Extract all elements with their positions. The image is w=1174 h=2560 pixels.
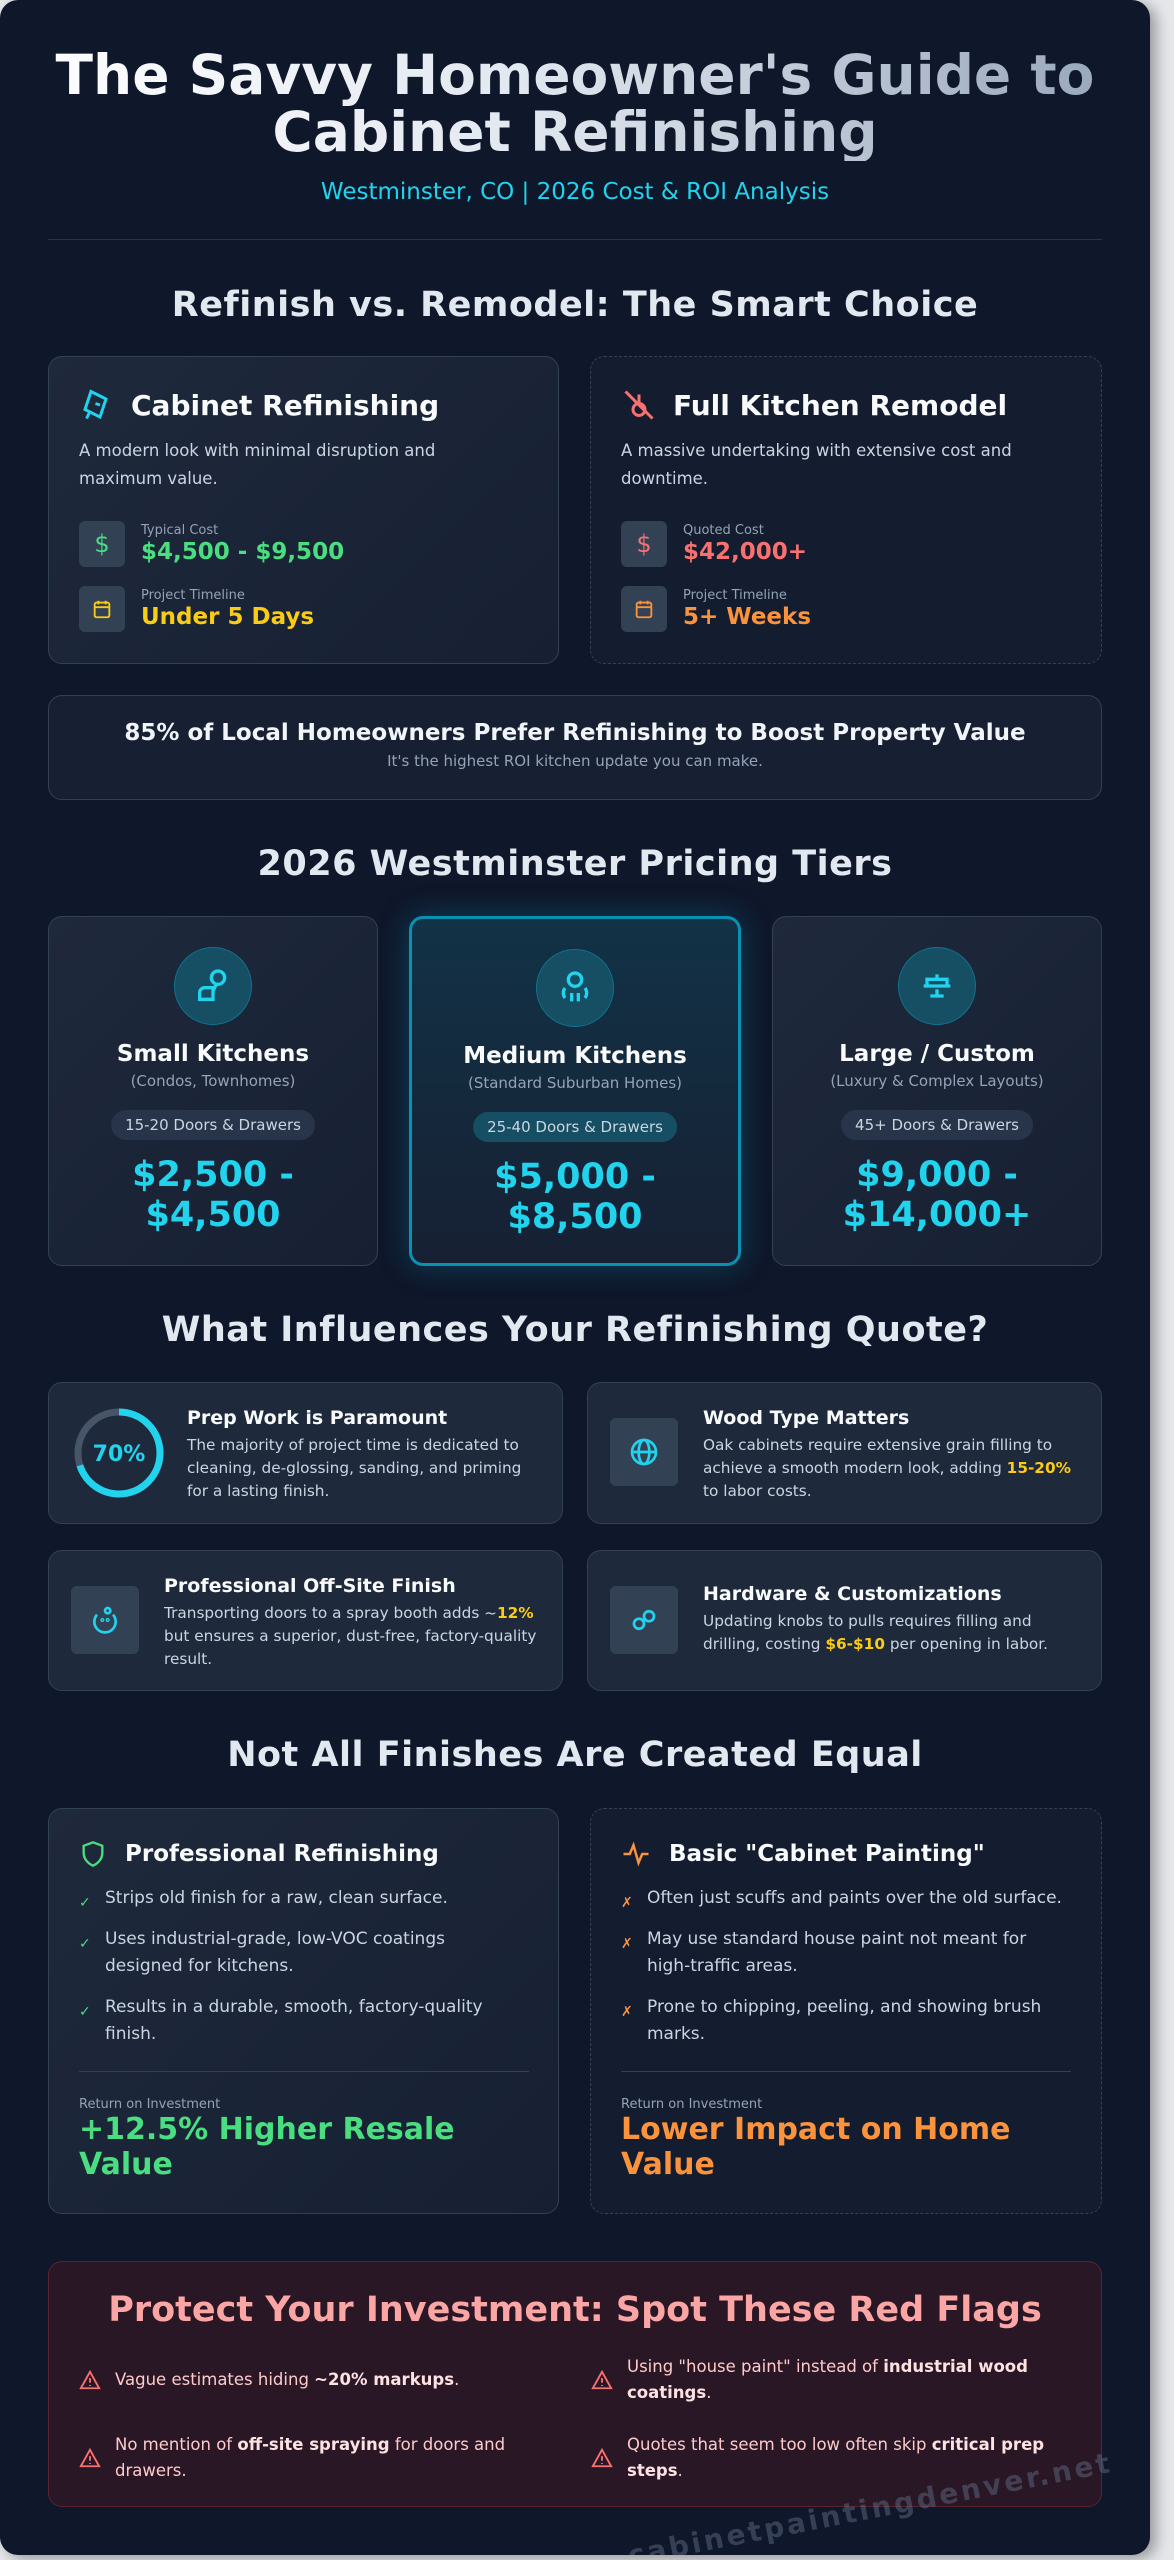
- panel: wood type: Wood Type Matters: [703, 1407, 909, 1429]
- panel: wood type: Oak cabinets require extensive grain filling to achieve a smooth modern look, adding 15-20% to labor costs.: [703, 1436, 1071, 1500]
- pill: [111, 1110, 315, 1140]
- card title: Basic "Cabinet Painting": [669, 1841, 985, 1867]
- price: $8,500: [507, 1197, 643, 1237]
- heading: refinish vs remodel: Refinish vs. Remodel: The Smart Choice: [172, 285, 978, 325]
- subtitle: Westminster, CO | 2026 Cost & ROI Analysis: [321, 179, 829, 205]
- panel: cabinet refinishing: [48, 356, 559, 664]
- x list: ✗: [621, 1895, 633, 1911]
- flag 4: Quotes that seem too low often skip critical prep steps.: [627, 2435, 1044, 2480]
- stat: timeline: [621, 586, 811, 632]
- card title: Cabinet Refinishing: [131, 388, 439, 422]
- heading: pricing tiers: 2026 Westminster Pricing Tiers: [258, 844, 892, 884]
- price: $4,500: [145, 1195, 281, 1235]
- panel: prep work: Prep Work is Paramount: [187, 1407, 447, 1429]
- pill: 45+ Doors & Drawers: [855, 1116, 1019, 1134]
- stat: timeline: Under 5 Days: [141, 604, 314, 630]
- icon: [898, 947, 976, 1025]
- heading: influences: What Influences Your Refinishing Quote?: [162, 1310, 988, 1350]
- panel: medium kitchens: (Standard Suburban Homes): [468, 1074, 682, 1092]
- stat: cost: $: [636, 530, 652, 558]
- panel: small kitchens: (Condos, Townhomes): [131, 1072, 295, 1090]
- panel: hardware: [587, 1550, 1102, 1691]
- ring chart 70%: [74, 1408, 164, 1498]
- panel: large kitchens: Large / Custom: [839, 1041, 1035, 1067]
- roi: +12.5% Higher Resale Value: [79, 2112, 455, 2182]
- panel: prep work: The majority of project time is dedicated to cleaning, de-glossing, sanding, and priming for a lasting finish.: [187, 1436, 521, 1500]
- icon: [536, 949, 614, 1027]
- x list: ✗: [621, 2004, 633, 2020]
- panel: hardware: Hardware & Customizations: [703, 1583, 1002, 1605]
- stat: timeline: Project Timeline: [683, 588, 787, 602]
- panel: professional refinishing: [48, 1808, 559, 2214]
- flag 3: No mention of off-site spraying for doors and drawers.: [115, 2435, 505, 2480]
- x list: Often just scuffs and paints over the old surface.: [647, 1888, 1062, 1908]
- card title: Full Kitchen Remodel: [673, 388, 1007, 422]
- price: $2,500 -: [132, 1155, 294, 1195]
- stat: timeline: [79, 586, 314, 632]
- ring chart 70%: 70%: [93, 1442, 145, 1467]
- price: [494, 1157, 656, 1237]
- panel: small kitchens: Small Kitchens: [117, 1041, 309, 1067]
- icon: [174, 947, 252, 1025]
- stat: cost: [79, 521, 344, 567]
- x list: [621, 1888, 1062, 2044]
- panel: hardware: Updating knobs to pulls requires filling and drilling, costing $6-$10 per opening in labor.: [703, 1612, 1048, 1653]
- panel: medium kitchens: Medium Kitchens: [463, 1043, 687, 1069]
- stat: cost: [621, 521, 807, 567]
- callout: 85% banner: 85% of Local Homeowners Prefer Refinishing to Boost Property Value: [124, 720, 1026, 746]
- pill: [473, 1112, 677, 1142]
- checklist: ✓: [79, 1895, 91, 1911]
- pill: 15-20 Doors & Drawers: [125, 1116, 301, 1134]
- checklist: Results in a durable, smooth, factory-quality finish.: [105, 1997, 483, 2044]
- checklist: ✓: [79, 1936, 91, 1952]
- stat: cost: Typical Cost: [141, 522, 218, 538]
- checklist: Strips old finish for a raw, clean surface.: [105, 1888, 448, 1908]
- description: A massive undertaking with extensive cost and downtime.: [621, 441, 1012, 488]
- icon: spray: [71, 1586, 139, 1654]
- x list: Prone to chipping, peeling, and showing brush marks.: [647, 1997, 1041, 2044]
- price: [843, 1155, 1031, 1235]
- title: [0, 47, 1150, 161]
- pill: [841, 1110, 1033, 1140]
- panel: red flags: [48, 2261, 1102, 2507]
- x list: May use standard house paint not meant for high-traffic areas.: [647, 1929, 1026, 1976]
- pill: 25-40 Doors & Drawers: [487, 1118, 663, 1136]
- stat: cost: $4,500 - $9,500: [141, 538, 344, 564]
- panel: off-site finish: Transporting doors to a spray booth adds ~12% but ensures a superior, dust-free, factory-quality result.: [164, 1604, 536, 1668]
- icon: globe: [610, 1418, 678, 1486]
- panel: off-site finish: Professional Off-Site Finish: [164, 1575, 456, 1597]
- heading: finishes: Not All Finishes Are Created Equal: [227, 1735, 923, 1775]
- roi: Return on Investment: [79, 2097, 220, 2112]
- price: $14,000+: [843, 1195, 1031, 1235]
- price: $9,000 -: [856, 1155, 1018, 1195]
- price: [132, 1155, 294, 1235]
- panel: wood type: [587, 1382, 1102, 1524]
- stat: timeline: 5+ Weeks: [683, 604, 811, 630]
- panel: medium kitchens: [409, 916, 741, 1266]
- title: Cabinet Refinishing: [272, 100, 878, 164]
- stat: cost: $: [94, 530, 110, 558]
- roi: Return on Investment: [621, 2097, 762, 2112]
- x list: ✗: [621, 1936, 633, 1952]
- stat: cost: $42,000+: [683, 538, 807, 564]
- description: A modern look with minimal disruption and maximum value.: [79, 441, 435, 488]
- checklist: ✓: [79, 2004, 91, 2020]
- panel: full kitchen remodel: [590, 356, 1102, 664]
- icon: link: [610, 1586, 678, 1654]
- panel: basic painting: [590, 1808, 1102, 2214]
- flag 1: Vague estimates hiding ~20% markups.: [115, 2370, 459, 2389]
- panel: large kitchens: [772, 916, 1102, 1266]
- panel: small kitchens: [48, 916, 378, 1266]
- panel: large kitchens: (Luxury & Complex Layouts): [830, 1072, 1044, 1090]
- callout: 85% banner: [48, 695, 1102, 800]
- stat: cost: Quoted Cost: [683, 522, 764, 538]
- flag 2: Using "house paint" instead of industrial wood coatings.: [627, 2357, 1028, 2402]
- card title: Professional Refinishing: [125, 1841, 439, 1867]
- red flags heading: Protect Your Investment: Spot These Red Flags: [108, 2290, 1042, 2330]
- roi: Lower Impact on Home Value: [621, 2112, 1010, 2182]
- callout: 85% banner: It's the highest ROI kitchen update you can make.: [387, 752, 763, 770]
- stat: timeline: Project Timeline: [141, 588, 245, 602]
- checklist: [79, 1888, 483, 2044]
- checklist: Uses industrial-grade, low-VOC coatings designed for kitchens.: [105, 1929, 445, 1976]
- panel: prep work: [48, 1382, 563, 1524]
- price: $5,000 -: [494, 1157, 656, 1197]
- panel: off-site finish: [48, 1550, 563, 1691]
- title: The Savvy Homeowner's Guide to: [56, 43, 1094, 107]
